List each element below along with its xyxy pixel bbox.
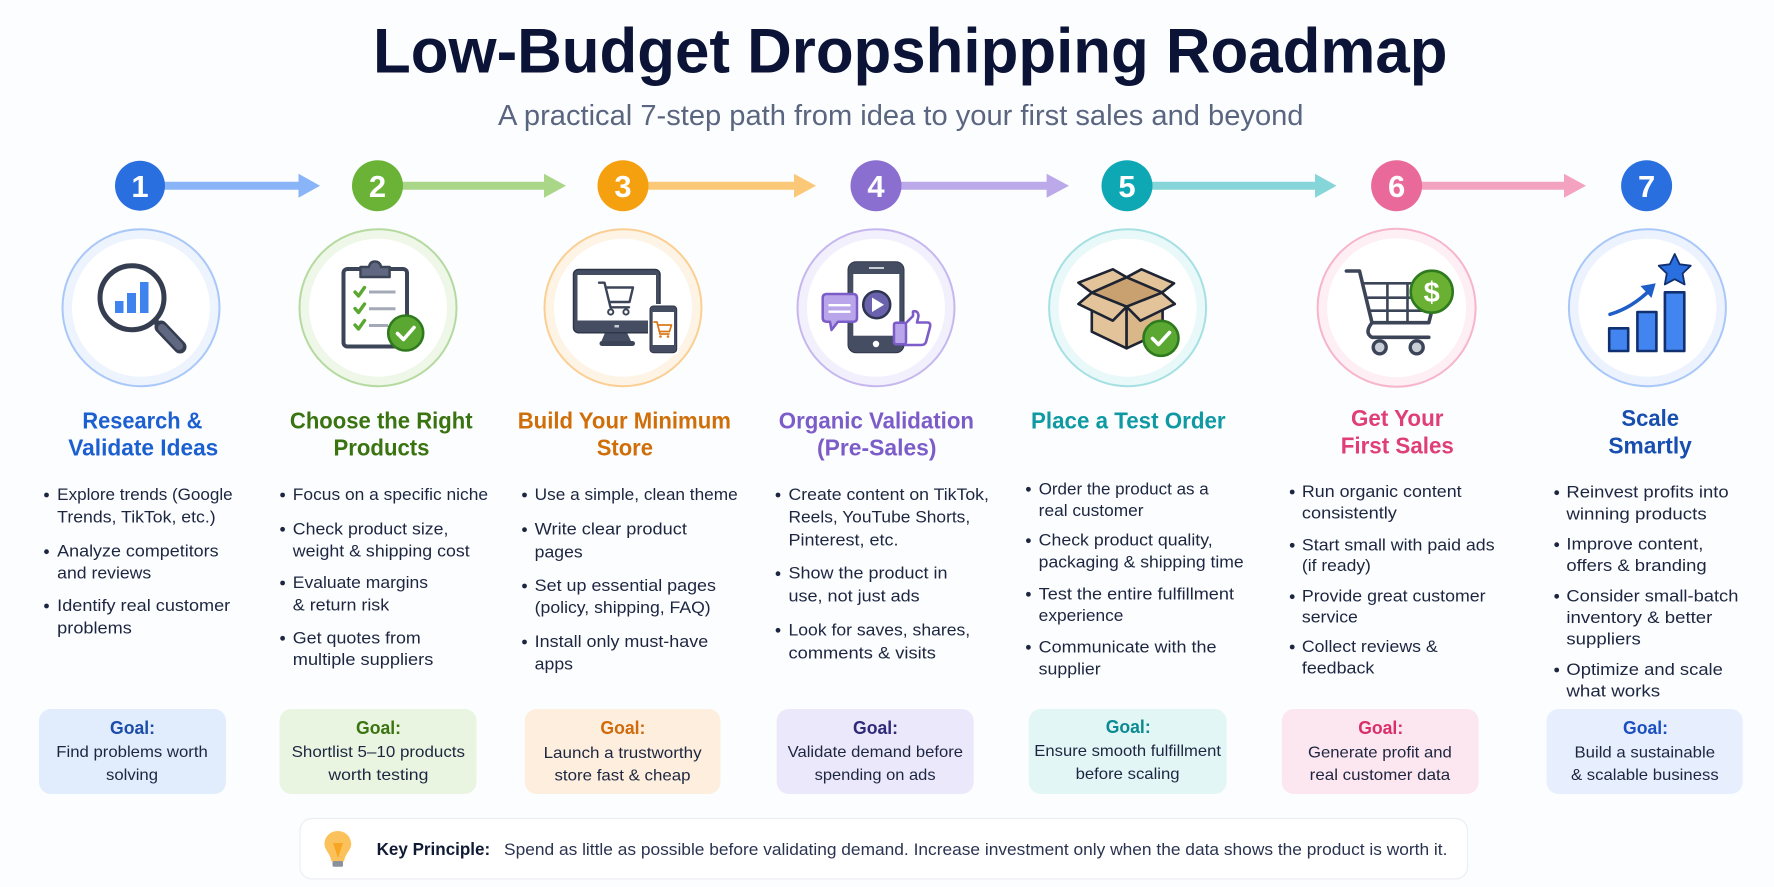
goal box: step 2: Shortlist 5–10 products [292, 744, 465, 761]
goal box: step 4: Validate demand before [788, 744, 963, 761]
bullet list: step 3: Set up essential pages [535, 576, 716, 595]
bullet list: step 1: Explore trends (Google [57, 485, 233, 504]
key principle text: Spend as little as possible before validating demand. Increase investment only when the data shows the product is worth it. [504, 840, 1447, 859]
ring: step 4 [798, 229, 954, 386]
bullet list: step 6: (if ready) [1302, 556, 1371, 575]
step 4 number badge: 4 [867, 169, 885, 204]
ring: step 6 [1318, 229, 1476, 387]
bullet list: step 4: Reels, YouTube Shorts, [788, 508, 970, 527]
bullet list: step 5: Communicate with the [1039, 637, 1216, 656]
bullet list: step 5: Check product quality, [1039, 531, 1213, 550]
heading: step 2: Choose the Right [290, 408, 473, 434]
step 3 number badge [598, 160, 648, 211]
bullet list: step 2: Check product size, [293, 519, 448, 538]
goal box: step 3 [525, 709, 720, 794]
goal box: step 5: Goal: [1106, 716, 1151, 737]
bullet list: step 7: inventory & better [1566, 608, 1713, 627]
arrow: step 2 to 3 [398, 174, 566, 198]
goal box: step 5: Ensure smooth fulfillment [1034, 743, 1222, 760]
bullet list: step 2: weight & shipping cost [292, 541, 470, 560]
goal box: step 1: Find problems worth [56, 744, 208, 761]
goal box: step 1: solving [106, 767, 158, 784]
panel: step 5 test order [1026, 160, 1336, 794]
step 3 number badge: 3 [614, 169, 632, 204]
heading: step 2 [290, 408, 473, 460]
heading: step 4: Organic Validation [779, 408, 974, 434]
step 5 number badge: 5 [1118, 169, 1136, 204]
goal box: step 7: Build a sustainable [1574, 744, 1715, 762]
step 6 number badge [1371, 160, 1422, 211]
bullet list: step 6: feedback [1302, 658, 1375, 677]
bullet list: step 4: Show the product in [788, 564, 948, 583]
bullet list: step 4: Look for saves, shares, [788, 620, 970, 639]
heading: step 3: Store [597, 434, 653, 460]
bullet list: step 7: winning products [1565, 504, 1707, 523]
heading: step 2: Products [334, 434, 430, 460]
heading: step 6: First Sales [1341, 432, 1454, 458]
panel: step 1 research [39, 161, 320, 794]
bullet list: step 4: comments & visits [788, 643, 936, 662]
panel: step 4 organic validation [776, 160, 1069, 794]
panel: step 2 choose products [280, 160, 566, 794]
heading: step 7: Smartly [1608, 432, 1692, 458]
bullet list: step 3: Use a simple, clean theme [535, 485, 738, 504]
bullet list: step 5: Order the product as a [1039, 479, 1209, 498]
heading: step 1: Validate Ideas [68, 434, 218, 460]
bullet list: step 2 [280, 485, 488, 669]
bullet list: step 3: Write clear product [535, 520, 687, 539]
bullet list: step 5: packaging & shipping time [1039, 553, 1244, 572]
heading: step 7 [1608, 405, 1692, 458]
bullet list: step 7 [1554, 483, 1738, 701]
step 1 number badge [115, 161, 165, 211]
bullet list: step 5: real customer [1039, 501, 1144, 520]
title: Low-Budget Dropshipping Roadmap [373, 17, 1448, 87]
ring: step 2 [300, 229, 456, 386]
step 4 number badge [850, 160, 902, 211]
arrow: step 6 to 7 [1418, 174, 1586, 198]
bullet list: step 6: service [1302, 608, 1358, 627]
goal box: step 1: Goal: [110, 717, 155, 738]
icon: light bulb [324, 831, 351, 867]
panel: step 3 build store [518, 160, 816, 794]
goal box: step 6 [1282, 709, 1479, 794]
callout: key principle [300, 818, 1468, 879]
bullet list: step 6: Run organic content [1302, 482, 1462, 501]
step 5 number badge [1102, 160, 1152, 211]
bullet list: step 7: Reinvest profits into [1566, 483, 1729, 502]
bullet list: step 1 [44, 485, 233, 637]
bullet list: step 6: Start small with paid ads [1302, 535, 1495, 554]
bullet list: step 1: and reviews [57, 564, 151, 583]
bullet list: step 7: Consider small-batch [1566, 586, 1738, 605]
heading: step 4 [779, 408, 974, 460]
bullet list: step 2: & return risk [293, 595, 390, 614]
bullet list: step 2: Focus on a specific niche [293, 485, 488, 504]
icon: cart with dollar coin [1346, 271, 1453, 354]
goal box: step 7: & scalable business [1571, 767, 1719, 784]
heading: step 3 [518, 408, 731, 460]
goal box: step 3: Goal: [600, 717, 645, 738]
bullet list: step 4 [776, 485, 989, 662]
goal box: step 5: before scaling [1076, 766, 1180, 783]
ring: step 5 [1049, 229, 1206, 386]
bullet list: step 7: what works [1565, 682, 1660, 701]
bullet list: step 7: suppliers [1566, 630, 1641, 649]
icon: cart with dollar coin: $ [1424, 277, 1440, 309]
heading: step 3: Build Your Minimum [518, 408, 731, 434]
arrow: step 4 to 5 [897, 174, 1069, 198]
bullet list: step 1: Trends, TikTok, etc.) [57, 508, 216, 527]
bullet list: step 3: (policy, shipping, FAQ) [535, 598, 711, 617]
bullet list: step 3: pages [535, 542, 583, 561]
heading: step 7: Scale [1621, 405, 1679, 431]
icon: monitor and phone with carts [574, 270, 679, 355]
ring: step 7 [1569, 229, 1726, 386]
step 7 number badge [1621, 160, 1672, 211]
bullet list: step 2: Get quotes from [293, 628, 421, 647]
bullet list: step 6 [1290, 482, 1495, 677]
bullet list: step 4: Create content on TikTok, [788, 485, 989, 504]
panel: step 6 first sales [1282, 160, 1586, 794]
bullet list: step 5: supplier [1039, 659, 1101, 678]
icon: phone with play, chat and thumbs up [823, 262, 930, 353]
bullet list: step 3: Install only must-have [535, 632, 708, 651]
goal box: step 3: Launch a trustworthy [544, 745, 702, 762]
icon: magnifying glass with bars [100, 266, 180, 347]
goal box: step 7: Goal: [1623, 717, 1668, 738]
step 1 number badge: 1 [131, 169, 149, 204]
arrow: step 5 to 6 [1148, 174, 1336, 198]
bullet list: step 1: Identify real customer [57, 596, 231, 615]
heading: step 1: Research & [82, 408, 202, 434]
ring: step 1 [62, 229, 220, 386]
bullet list: step 4: Pinterest, etc. [788, 530, 898, 549]
goal box: step 2 [280, 709, 476, 794]
heading: step 4: (Pre-Sales) [817, 434, 936, 460]
goal box: step 6: real customer data [1310, 767, 1450, 784]
bullet list: step 5 [1026, 479, 1244, 678]
bullet list: step 7: offers & branding [1566, 556, 1707, 575]
goal box: step 5 [1029, 709, 1227, 794]
icon: growth bars, arrow and star [1609, 254, 1691, 351]
goal box: step 3: store fast & cheap [554, 768, 691, 784]
bullet list: step 1: Analyze competitors [57, 542, 219, 561]
ring: step 3 [544, 229, 702, 386]
bullet list: step 3: apps [535, 655, 573, 674]
goal box: step 7 [1547, 709, 1743, 794]
bullet list: step 5: experience [1039, 606, 1123, 625]
goal box: step 4: Goal: [853, 717, 898, 738]
bullet list: step 2: Evaluate margins [293, 573, 428, 592]
bullet list: step 5: Test the entire fulfillment [1039, 584, 1234, 603]
bullet list: step 7: Improve content, [1566, 535, 1703, 554]
step 2 number badge: 2 [369, 169, 386, 204]
arrow: step 1 to 2 [160, 174, 320, 198]
bullet list: step 6: consistently [1302, 503, 1397, 522]
goal box: step 6: Generate profit and [1308, 744, 1452, 762]
heading: step 6: Get Your [1351, 405, 1444, 431]
goal box: step 2: Goal: [356, 717, 401, 738]
step 6 number badge: 6 [1388, 169, 1405, 204]
bullet list: step 1: problems [57, 618, 132, 637]
goal box: step 4: spending on ads [815, 767, 936, 784]
bullet list: step 7: Optimize and scale [1566, 660, 1723, 679]
bullet list: step 4: use, not just ads [788, 587, 920, 606]
goal box: step 4 [777, 709, 974, 794]
subtitle: A practical 7-step path from idea to your first sales and beyond [498, 100, 1304, 132]
key principle label: Key Principle: [377, 839, 490, 859]
bullet list: step 2: multiple suppliers [293, 650, 433, 669]
arrow: step 3 to 4 [644, 174, 816, 198]
step 2 number badge [352, 160, 403, 211]
heading: step 5: Place a Test Order [1031, 408, 1226, 434]
icon: clipboard with check [344, 262, 423, 350]
goal box: step 2: worth testing [327, 767, 428, 784]
heading: step 1 [68, 408, 218, 460]
bullet list: step 3 [522, 485, 738, 674]
heading: step 6 [1341, 405, 1454, 458]
goal box: step 1 [39, 709, 226, 794]
goal box: step 6: Goal: [1358, 717, 1403, 738]
panel: step 7 scale [1547, 160, 1743, 794]
step 7 number badge: 7 [1638, 169, 1655, 204]
icon: open box with check [1078, 269, 1178, 356]
bullet list: step 6: Collect reviews & [1302, 637, 1438, 656]
bullet list: step 6: Provide great customer [1302, 587, 1486, 606]
